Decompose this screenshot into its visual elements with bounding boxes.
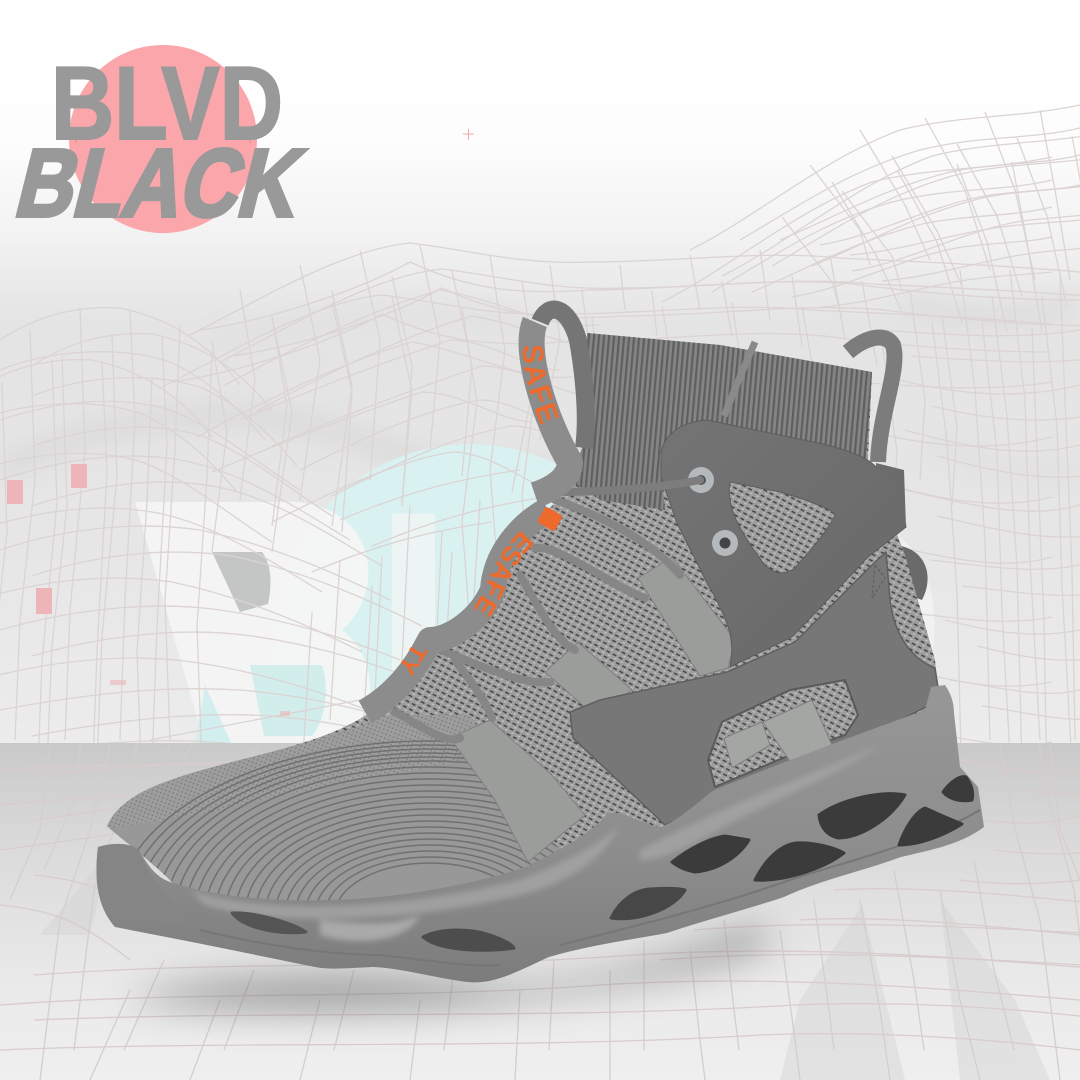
shoe ground shadow <box>125 925 770 1010</box>
soft terrain shading <box>0 300 1080 476</box>
logo: BLVD BLACK: BLVD <box>51 46 283 162</box>
collar ribbing <box>570 333 872 510</box>
eyelets <box>688 467 738 556</box>
sole highlights <box>190 745 880 941</box>
logo: BLVD BLACK <box>7 45 314 237</box>
upper silhouette <box>107 333 940 920</box>
toe cap shading <box>96 844 190 927</box>
left pull tab tape <box>365 310 586 712</box>
floor grid lines <box>0 715 1080 1080</box>
upper cage panel <box>661 420 906 667</box>
logo: BLVD BLACK: BLACK <box>7 129 314 237</box>
cage stitch triangle <box>872 565 885 598</box>
ghost backdrop: cyan circle and faded letters <box>135 444 934 743</box>
tape lettering <box>401 346 562 676</box>
ghost backdrop: cyan circle and faded letters: LVD <box>372 442 947 813</box>
sole holes <box>232 777 973 950</box>
laces <box>395 500 680 739</box>
toe box <box>107 715 560 900</box>
wireframe terrain lines <box>0 105 1080 792</box>
glitch squares <box>7 464 290 716</box>
lower cage panel <box>570 552 940 825</box>
lower cage window <box>708 680 858 787</box>
outsole <box>96 685 984 982</box>
right pull loop <box>848 337 894 462</box>
sneaker <box>96 300 984 982</box>
window mesh behind cage <box>730 482 835 572</box>
lower cage window straps <box>724 700 832 770</box>
tape lettering: TY <box>401 646 428 676</box>
ghost triangles on floor <box>40 850 1050 1080</box>
floor panel <box>0 743 1080 1080</box>
vertical lace end <box>724 342 755 416</box>
sole rim lines <box>200 810 980 966</box>
tape lettering: ESAFE <box>474 531 534 618</box>
heel collar band <box>876 463 906 527</box>
plus mark <box>463 129 474 140</box>
heel mesh bulge <box>895 545 928 600</box>
tape lettering: SAFE <box>522 346 559 424</box>
upper straps <box>450 557 735 862</box>
top lace <box>556 480 700 492</box>
